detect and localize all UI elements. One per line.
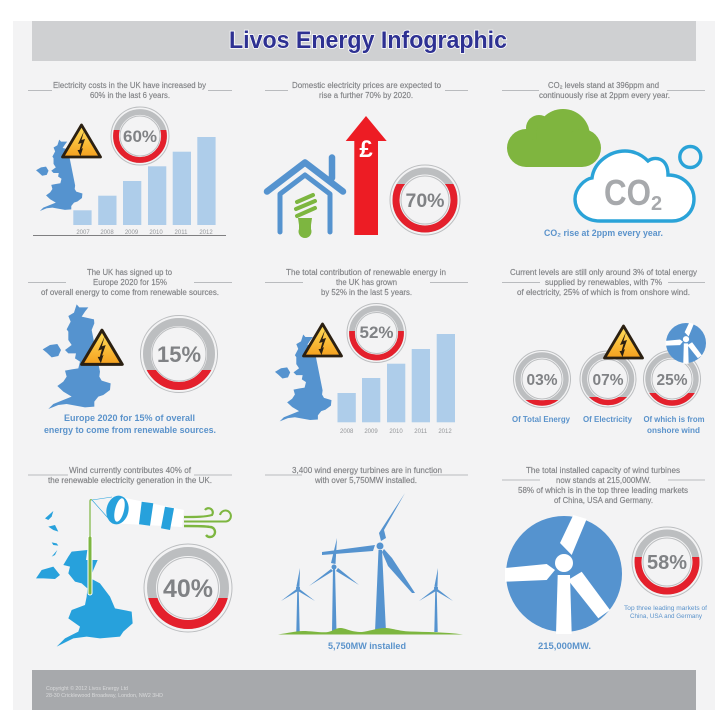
intro text — [48, 466, 212, 485]
intro text: Electricity costs in the UK have increased by — [53, 81, 206, 90]
intro text: The UK has signed up to — [87, 268, 173, 277]
turbine one — [281, 568, 315, 632]
intro text: with over 5,750MW installed. — [314, 476, 417, 485]
footer — [32, 670, 696, 710]
gauge: 15% — [140, 316, 218, 392]
map: UK — [43, 304, 111, 409]
bar chart: 2007-2012: 2012 — [199, 230, 213, 236]
bar chart: 2007-2012: 2007 — [76, 230, 90, 236]
ground — [278, 628, 463, 634]
caption: 5,750MW installed — [328, 641, 406, 651]
intro text: the renewable electricity generation in the UK. — [48, 476, 212, 485]
intro text: 60% in the last 6 years. — [90, 91, 170, 100]
intro text — [53, 81, 206, 100]
icon: warning — [82, 330, 122, 364]
intro text: the UK has grown — [336, 278, 397, 287]
turbine four — [419, 568, 453, 632]
panel: turbines installed — [265, 466, 468, 651]
gauge: 52%: 52% — [359, 323, 394, 342]
bar chart: 2007-2012 — [73, 137, 216, 236]
intro text: now stands at 215,000MW. — [556, 476, 651, 485]
caption: 215,000MW. — [538, 641, 591, 651]
map: UK with islands — [36, 511, 133, 647]
intro text: 3,400 wind energy turbines are in function — [292, 466, 442, 475]
small caption: China, USA and Germany — [630, 613, 703, 620]
intro text: The total contribution of renewable energy in — [286, 268, 446, 277]
arrow: rising pound — [346, 116, 387, 235]
intro text: of overall energy to come from renewable sources. — [41, 288, 219, 297]
gauge: 03%: 03% — [526, 372, 558, 389]
icon: large turbine disc — [505, 515, 622, 634]
bar chart: 2008-2012: 2011 — [414, 429, 428, 435]
copyright text: Copyright © 2012 Livos Energy Ltd — [46, 685, 128, 692]
panel: electricity costs — [28, 81, 232, 236]
bar chart: 2007-2012: 2008 — [100, 230, 114, 236]
caption: energy to come from renewable sources. — [44, 425, 216, 436]
gauge: 52% — [347, 304, 406, 362]
intro text: continuously rise at 2ppm every year. — [539, 91, 670, 100]
intro text: CO₂ levels stand at 396ppm and — [548, 81, 659, 90]
bar chart: 2007-2012: 2011 — [175, 230, 188, 236]
caption — [44, 413, 216, 436]
title: Livos Energy Infographic — [229, 27, 507, 54]
caption: CO₂ rise at 2ppm every year. — [544, 228, 663, 238]
intro text: supplied by renewables, with 7% — [545, 278, 662, 287]
gauge: 70%: 70% — [405, 190, 445, 212]
small caption: Top three leading markets of — [624, 605, 707, 612]
intro text — [510, 268, 697, 297]
captions: Of Electricity — [583, 414, 632, 424]
icon: windsock — [90, 494, 231, 593]
panel: Europe 2020 — [28, 268, 232, 436]
bar chart: 2008-2012: 2008 — [340, 429, 354, 435]
intro text: Wind currently contributes 40% of — [69, 466, 192, 475]
intro text: Current levels are still only around 3% of total energy — [510, 268, 697, 277]
panel: wind contribution — [28, 466, 232, 647]
icon: CO2 cloud — [575, 146, 701, 221]
intro text: Domestic electricity prices are expected to — [292, 81, 442, 90]
bar chart: 2008-2012 — [338, 334, 455, 435]
gauge: 40% — [144, 544, 232, 632]
bar chart: 2008-2012: 2009 — [364, 429, 378, 435]
gauge: 70% — [390, 165, 460, 235]
captions: Of which is from — [644, 414, 705, 424]
icon: small turbine disc — [666, 323, 706, 364]
gauge: 25% — [644, 350, 700, 408]
intro text: The total installed capacity of wind turbines — [526, 466, 680, 475]
caption: Europe 2020 for 15% of overall — [64, 413, 195, 424]
gauge: 60%: 60% — [123, 127, 157, 146]
captions: onshore wind — [647, 425, 700, 435]
bar chart: 2008-2012: 2012 — [438, 429, 452, 435]
gauge: 60% — [111, 107, 169, 165]
intro text — [286, 268, 446, 297]
icon: CO2 cloud: CO — [604, 172, 651, 213]
intro text: rise a further 70% by 2020. — [319, 91, 413, 100]
intro text: Europe 2020 for 15% — [93, 278, 167, 287]
captions — [512, 414, 705, 435]
intro text: 58% of which is in the top three leading markets — [518, 486, 688, 495]
icon: warning — [62, 125, 100, 157]
icon: house with bulb — [267, 158, 343, 238]
copyright text: 28-30 Cricklewood Broadway, London, NW2 3HD — [46, 693, 163, 699]
gauge: 25%: 25% — [656, 372, 688, 389]
panel: domestic prices — [265, 81, 468, 238]
turbine two — [309, 538, 359, 632]
illustration: wind farm — [278, 493, 463, 634]
gauge: 03% — [514, 350, 570, 408]
intro text — [292, 81, 442, 100]
header band — [32, 21, 696, 61]
small caption — [624, 605, 707, 620]
intro text: by 52% in the last 5 years. — [321, 288, 412, 297]
intro text: of China, USA and Germany. — [554, 496, 653, 505]
icon: warning — [604, 326, 642, 358]
map: UK — [275, 334, 331, 421]
icon: green cloud — [507, 109, 601, 167]
panel: current levels — [502, 268, 706, 435]
intro text — [292, 466, 442, 485]
panel: installed capacity — [502, 466, 707, 651]
gauge: 58% — [632, 527, 702, 597]
panel: renewable contribution — [265, 268, 468, 435]
gauge: 07%: 07% — [592, 372, 624, 389]
icon: warning — [304, 324, 342, 356]
bar chart: 2007-2012: 2009 — [125, 230, 139, 236]
big turbine — [322, 493, 415, 632]
captions: Of Total Energy — [512, 414, 570, 424]
arrow: rising pound: £ — [359, 136, 373, 163]
bar chart: 2008-2012: 2010 — [389, 429, 403, 435]
gauge: 15%: 15% — [157, 342, 201, 367]
intro text — [539, 81, 670, 100]
gauge: 58%: 58% — [647, 552, 687, 574]
icon: CO2 cloud: 2 — [651, 193, 662, 215]
map: UK — [36, 140, 82, 211]
intro text: of electricity, 25% of which is from onshore wind. — [517, 288, 690, 297]
gauge: 07% — [580, 351, 636, 407]
intro text — [518, 466, 688, 505]
copyright text — [46, 685, 163, 699]
gauge: 40%: 40% — [163, 575, 213, 603]
intro text — [41, 268, 219, 297]
bar chart: 2007-2012: 2010 — [149, 230, 163, 236]
panel: CO2 levels — [502, 81, 705, 238]
